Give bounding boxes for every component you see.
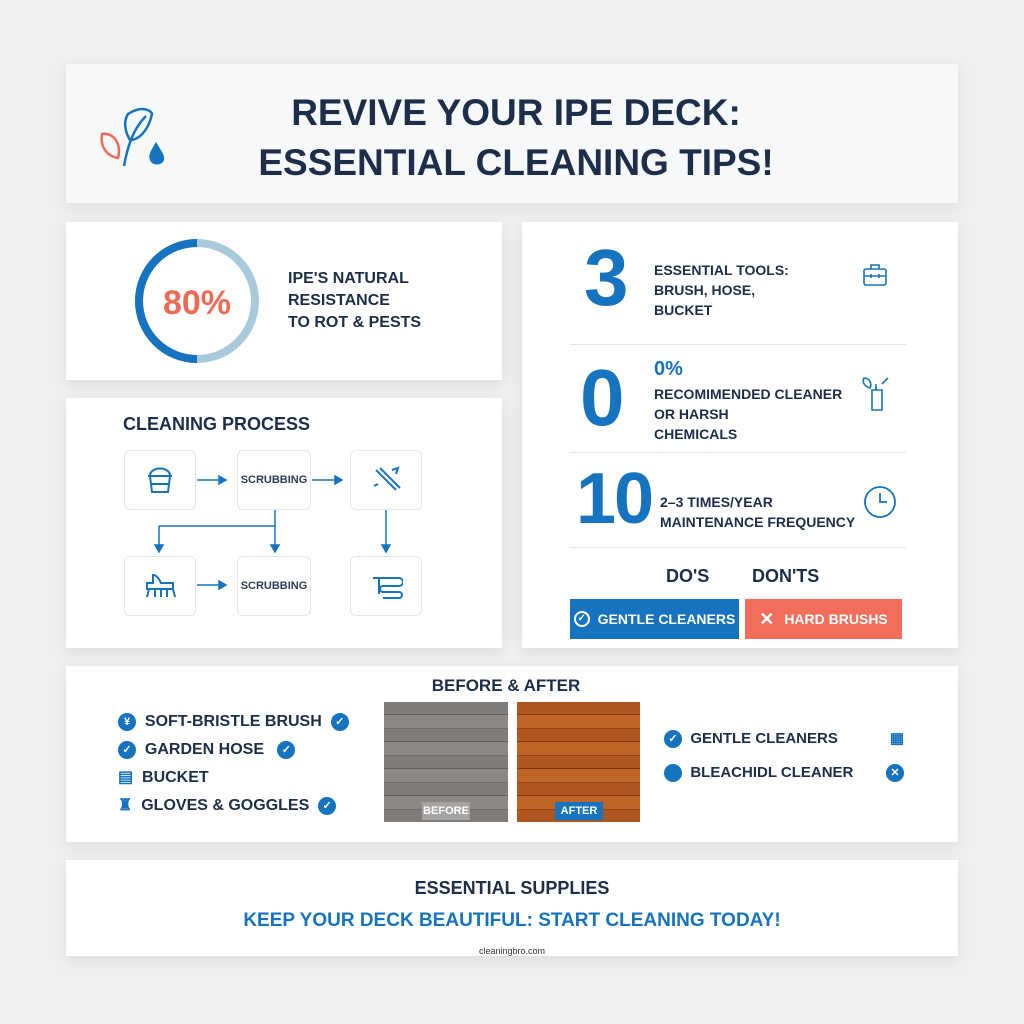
stat: 3 tools: BRUSH, HOSE,: [654, 282, 755, 298]
step: brush: [124, 556, 196, 616]
source url: cleaningbro.com: [479, 946, 545, 956]
stat label: TO ROT & PESTS: [288, 314, 421, 331]
panel: before & after: [66, 666, 958, 842]
supplies checklist: ✓: [323, 800, 332, 812]
do button: [570, 599, 739, 639]
panel: stats and do's/don'ts: [522, 222, 958, 648]
do/don't list: BLEACHIDL CLEANER: [690, 764, 853, 781]
stat: 10 maintenance: MAINTENANCE FREQUENCY: [660, 514, 855, 530]
supplies checklist: [118, 713, 349, 815]
supplies checklist: ✓: [122, 744, 132, 756]
step: hose: [350, 556, 422, 616]
stat: 3 tools: 3: [584, 233, 628, 322]
supplies checklist: SOFT-BRISTLE BRUSH: [145, 713, 322, 730]
stat: 0%: [580, 353, 888, 442]
supplies checklist: ✓: [335, 716, 344, 728]
stat: 0%: 0%: [654, 358, 683, 380]
flow arrows: [154, 474, 392, 590]
don't button: HARD BRUSHS: [784, 611, 888, 627]
do/don't list: GENTLE CLEANERS: [690, 730, 838, 747]
supplies checklist: ▤ BUCKET: [118, 769, 209, 786]
stat: 0%: CHEMICALS: [654, 426, 737, 442]
do button: ✓: [577, 613, 586, 624]
stat label: RESISTANCE: [288, 292, 390, 309]
step: bucket: [124, 450, 196, 510]
supplies checklist: ¥: [124, 716, 130, 728]
title: ESSENTIAL CLEANING TIPS!: [258, 142, 774, 183]
stat: 10 maintenance: [576, 459, 896, 539]
don't button: [745, 599, 902, 639]
step: tools: [350, 450, 422, 510]
footer panel: [66, 860, 958, 956]
title: REVIVE YOUR IPE DECK:: [291, 92, 741, 133]
stat: 10 maintenance: 2–3 TIMES/YEAR: [660, 494, 773, 510]
footer heading: ESSENTIAL SUPPLIES: [415, 878, 609, 898]
donut chart: [135, 239, 259, 363]
supplies checklist: ♜ GLOVES & GOGGLES: [118, 797, 309, 814]
icon: toolbox: [863, 264, 887, 286]
supplies checklist: GARDEN HOSE: [145, 741, 264, 758]
step: scrubbing 2: [237, 556, 311, 616]
stat label: IPE'S NATURAL: [288, 270, 409, 287]
donut chart: 80%: [163, 284, 231, 322]
stat label: [288, 270, 421, 331]
icon: clock: [864, 486, 896, 518]
heading: CLEANING PROCESS: [123, 414, 310, 434]
stat: 3 tools: [584, 233, 887, 322]
step: scrubbing 2: SCRUBBING: [241, 580, 307, 592]
call to action: KEEP YOUR DECK BEAUTIFUL: START CLEANING TODAY!: [243, 910, 781, 931]
image: after (wood): [517, 702, 640, 822]
image: before (grey wood): BEFORE: [423, 805, 469, 817]
header panel: [66, 64, 958, 203]
stat: 0%: 0: [580, 353, 624, 442]
icon: spray bottle: [862, 377, 888, 411]
stat: 0%: OR HARSH: [654, 406, 729, 422]
do button: GENTLE CLEANERS: [598, 611, 735, 627]
do's heading: DO'S: [666, 566, 709, 586]
step: scrubbing: [237, 450, 311, 510]
icon: leaves and water drop: [100, 108, 164, 166]
step: scrubbing: SCRUBBING: [241, 474, 307, 486]
stat: 3 tools: ESSENTIAL TOOLS:: [654, 262, 789, 278]
heading: BEFORE & AFTER: [432, 676, 580, 695]
do/don't list: [664, 730, 904, 782]
panel: cleaning process: [66, 398, 502, 648]
stat: 0%: RECOMIMENDED CLEANER: [654, 386, 842, 402]
don't button: ✕: [759, 608, 774, 628]
panel: 80% resistance: [66, 222, 502, 380]
do/don't list: ▦: [890, 730, 904, 747]
title: [258, 92, 774, 183]
supplies checklist: ✓: [282, 744, 291, 756]
image: before (grey wood): [384, 702, 508, 822]
do/don't list: ✕: [890, 767, 900, 779]
stat: 3 tools: BUCKET: [654, 302, 712, 318]
stat: 10 maintenance: 10: [576, 459, 652, 539]
do/don't list: ✓: [668, 733, 678, 745]
image: after (wood): AFTER: [561, 805, 597, 817]
don'ts heading: DON'TS: [752, 566, 819, 586]
